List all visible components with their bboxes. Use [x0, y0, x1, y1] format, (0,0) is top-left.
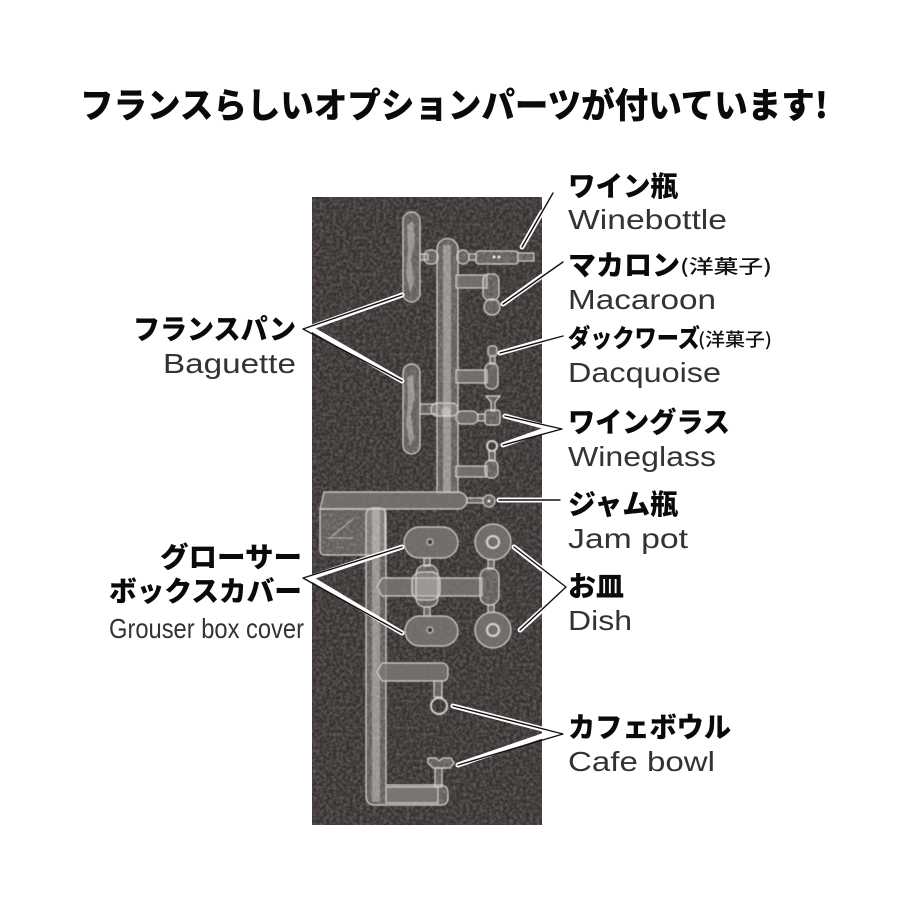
part: main upper runner [420, 239, 478, 493]
label: grouser box cover: Grouser box cover [109, 613, 304, 644]
label: dacquoise: (洋菓子) [698, 326, 772, 352]
part: upper grouser cover [404, 527, 458, 558]
part: lower dish [475, 612, 511, 648]
part: wine glass [478, 396, 500, 425]
label: dacquoise: ダックワーズ [568, 319, 700, 355]
label: cafe bowl [568, 706, 731, 777]
part: upper dish [475, 524, 511, 560]
label: baguette [133, 308, 296, 379]
panel: photo of clear parts sprue [312, 197, 542, 825]
label: macaroon: マカロン [568, 244, 680, 284]
label: wine bottle [568, 165, 727, 235]
part: cafe bowl lower [428, 758, 454, 787]
label: cafe bowl: カフェボウル [568, 706, 731, 746]
part: dacquoise [456, 346, 498, 389]
label: wine bottle: ワイン瓶 [568, 165, 678, 205]
label: macaroon [568, 244, 772, 315]
label: jam pot [568, 483, 688, 554]
label: dish: Dish [568, 605, 632, 636]
label: macaroon: Macaroon [568, 284, 716, 315]
leader lines: black core [303, 193, 566, 765]
part: main lower runner [366, 508, 448, 805]
label: dacquoise: Dacquoise [568, 357, 721, 388]
part: cross runner [377, 558, 499, 616]
label: jam pot: ジャム瓶 [568, 483, 678, 523]
label: grouser box cover: ボックスカバー [109, 570, 302, 610]
leader lines: white halo inside panel [312, 212, 542, 765]
label: dish: お皿 [568, 565, 624, 605]
part: jam pot [320, 492, 495, 509]
label: macaroon: (洋菓子) [680, 252, 772, 279]
label: grouser box cover [109, 536, 304, 644]
title: フランスらしいオプションパーツが付いています! [80, 78, 828, 129]
part: upper baguette [403, 212, 420, 302]
label: cafe bowl: Cafe bowl [568, 746, 715, 777]
part: macaroon [456, 274, 500, 315]
label: wine bottle: Winebottle [568, 204, 727, 235]
label: baguette: Baguette [163, 348, 296, 379]
label: wine glass [568, 401, 730, 472]
label: grouser box cover: グローサー [160, 536, 302, 576]
part: cafe bowl upper [377, 663, 448, 714]
part: second wine glass bowl [456, 441, 498, 478]
part: lower grouser cover [405, 616, 458, 646]
label: dish [568, 565, 632, 636]
part: wine bottle [476, 251, 534, 264]
label: wine glass: ワイングラス [568, 401, 730, 441]
label: jam pot: Jam pot [568, 523, 688, 554]
label: wine glass: Wineglass [568, 441, 716, 472]
label: baguette: フランスパン [133, 308, 296, 348]
part: grouser box corner piece [320, 509, 385, 555]
part: lower baguette [403, 364, 420, 454]
label: dacquoise [568, 319, 772, 388]
